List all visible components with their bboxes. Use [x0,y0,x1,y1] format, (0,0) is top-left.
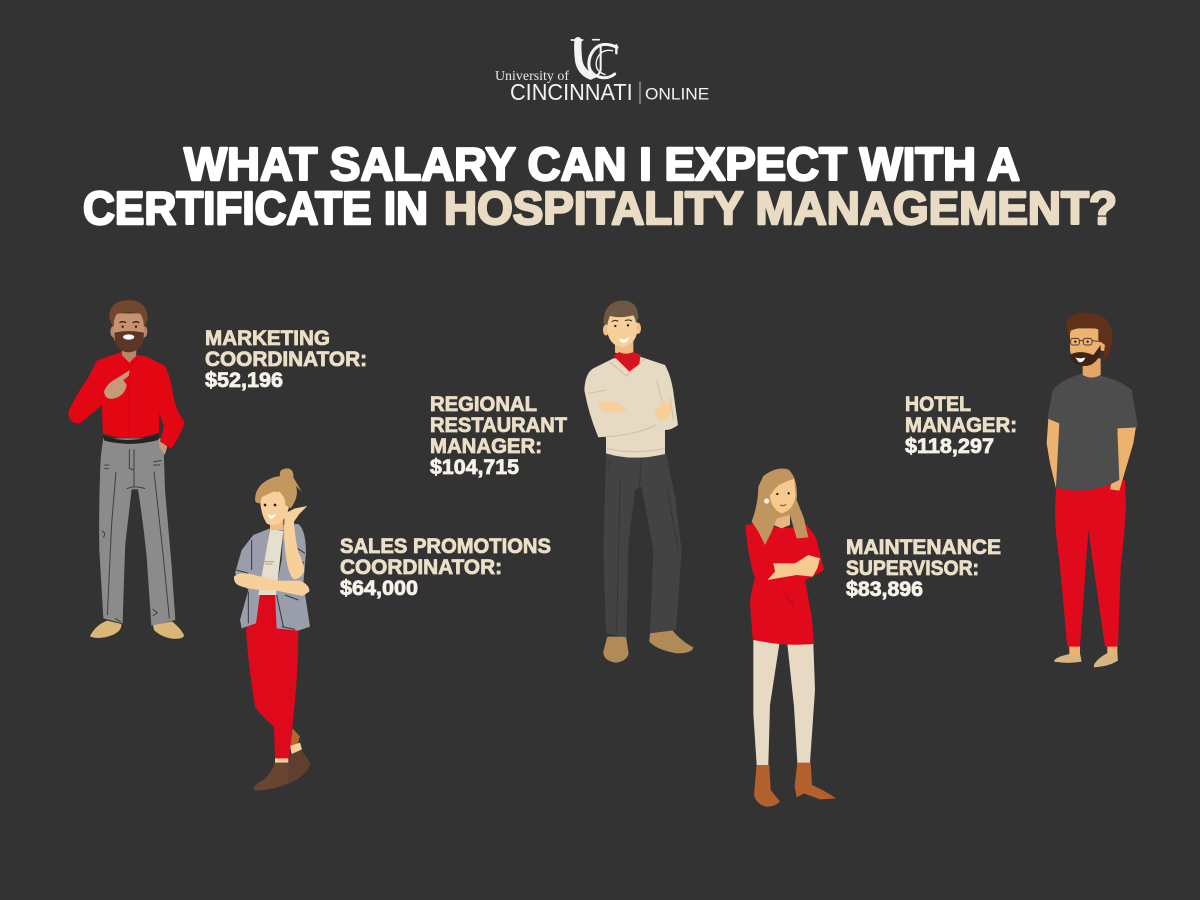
hair [255,468,302,508]
text: marketing coordinator salary: $52,196 [205,369,283,392]
text: regional restaurant manager salary: $104,715 [430,456,519,479]
title line 2, white part: CERTIFICATE IN [83,182,428,234]
smile [618,337,629,343]
text: marketing coordinator salary: COORDINATOR: [205,348,367,371]
text: hotel manager salary: $118,297 [905,435,994,458]
necklace [263,562,274,564]
person: sales promotions coordinator, grey blazer and red trousers [234,468,311,791]
socks [1054,653,1118,667]
text: Cincinnati: CINCINNATI [510,79,633,105]
text: sales promotions coordinator salary: COORDINATOR: [340,556,502,579]
text: regional restaurant manager salary: REGIONAL [430,393,537,416]
title [83,138,1117,234]
boots [603,629,693,663]
front boot [254,762,288,791]
cream leggings [753,640,815,765]
shoes [90,621,184,639]
text: marketing coordinator salary [205,327,367,392]
text: maintenance supervisor salary [846,536,1001,601]
beard [1069,345,1101,366]
person: marketing coordinator, red shirt and grey trousers [68,300,185,639]
text: Online: ONLINE [645,84,709,103]
neck [270,515,283,530]
dress folds [767,575,793,607]
hair [1066,313,1113,362]
earring [764,498,769,504]
neck [615,340,633,355]
left arm [1047,418,1060,488]
text: hotel manager salary: HOTEL [905,393,971,416]
raised arm [284,506,307,579]
hair back [752,468,808,545]
trouser creases [102,449,169,622]
smile [267,513,276,519]
ankle [275,743,302,763]
back foot and boot [288,728,311,784]
brows and eyes [612,320,632,322]
text: hotel manager salary [905,393,1017,458]
face [260,491,289,525]
smile [1075,357,1085,362]
person: hotel manager, grey t-shirt and red trousers [1047,313,1138,667]
glasses [1071,338,1102,345]
left hand [598,401,627,413]
neck [773,508,790,528]
right arm [1110,427,1136,491]
person: regional restaurant manager, cream sweater and dark trousers [584,301,693,663]
ears [603,324,609,336]
fringe [765,475,794,498]
title line 1: WHAT SALARY CAN I EXPECT WITH A [184,138,1020,190]
shirt seams [101,353,137,438]
hair [109,300,148,327]
text: maintenance supervisor salary: $83,896 [846,578,923,601]
t-shirt [1047,374,1138,491]
text: hotel manager salary: MANAGER: [905,414,1017,437]
pointing hand [104,370,130,399]
head [603,301,641,347]
text: maintenance supervisor salary: SUPERVISOR: [846,557,979,580]
beard [114,331,144,352]
ankles [1069,644,1117,655]
face [607,314,637,347]
smile [123,334,134,340]
sweater [584,357,678,458]
ear [1099,339,1106,351]
red dress [745,523,824,645]
text: University of: University of [495,69,569,84]
eyes [776,493,778,495]
text: marketing coordinator salary: MARKETING [205,327,330,350]
blazer lines [237,540,305,629]
forearm across waist [234,573,309,596]
crossed arms [767,555,820,580]
person: maintenance supervisor, red dress and cream leggings [745,468,836,807]
red trousers [246,595,298,758]
neck [1083,358,1101,377]
belt [103,433,159,444]
sweater seams [588,359,673,452]
text: regional restaurant manager salary: RESTAURANT [430,414,567,437]
trousers [99,438,175,626]
ears [110,326,116,337]
boots [754,762,836,807]
text: regional restaurant manager salary: MANAGER: [430,435,542,458]
red scarf [613,352,641,372]
mouth [780,504,786,506]
dark trousers [603,453,682,637]
hair [603,301,638,325]
eyes [1074,340,1076,343]
text: sales promotions coordinator salary [340,535,551,600]
icon: UC monogram [571,40,617,78]
eyes [264,504,266,506]
text: sales promotions coordinator salary: SALES PROMOTIONS [340,535,551,558]
shirt [68,352,185,449]
face [1070,328,1099,365]
right hand [653,401,672,421]
trouser creases [607,458,678,633]
face [113,313,144,351]
title line 2, highlighted part: HOSPITALITY MANAGEMENT? [444,182,1117,234]
eyes and brows [119,322,139,323]
hand in pocket [158,438,167,455]
text: sales promotions coordinator salary: $64,000 [340,577,418,600]
top [258,529,283,595]
red trousers [1055,480,1126,647]
neck [122,347,137,363]
grey blazer [235,524,310,631]
head [255,468,302,530]
text: regional restaurant manager salary [430,393,567,479]
divider [639,82,641,104]
text: maintenance supervisor salary: MAINTENANCE [846,536,1001,559]
face [770,478,796,513]
head [109,300,148,352]
logo: University of Cincinnati Online [495,40,709,105]
